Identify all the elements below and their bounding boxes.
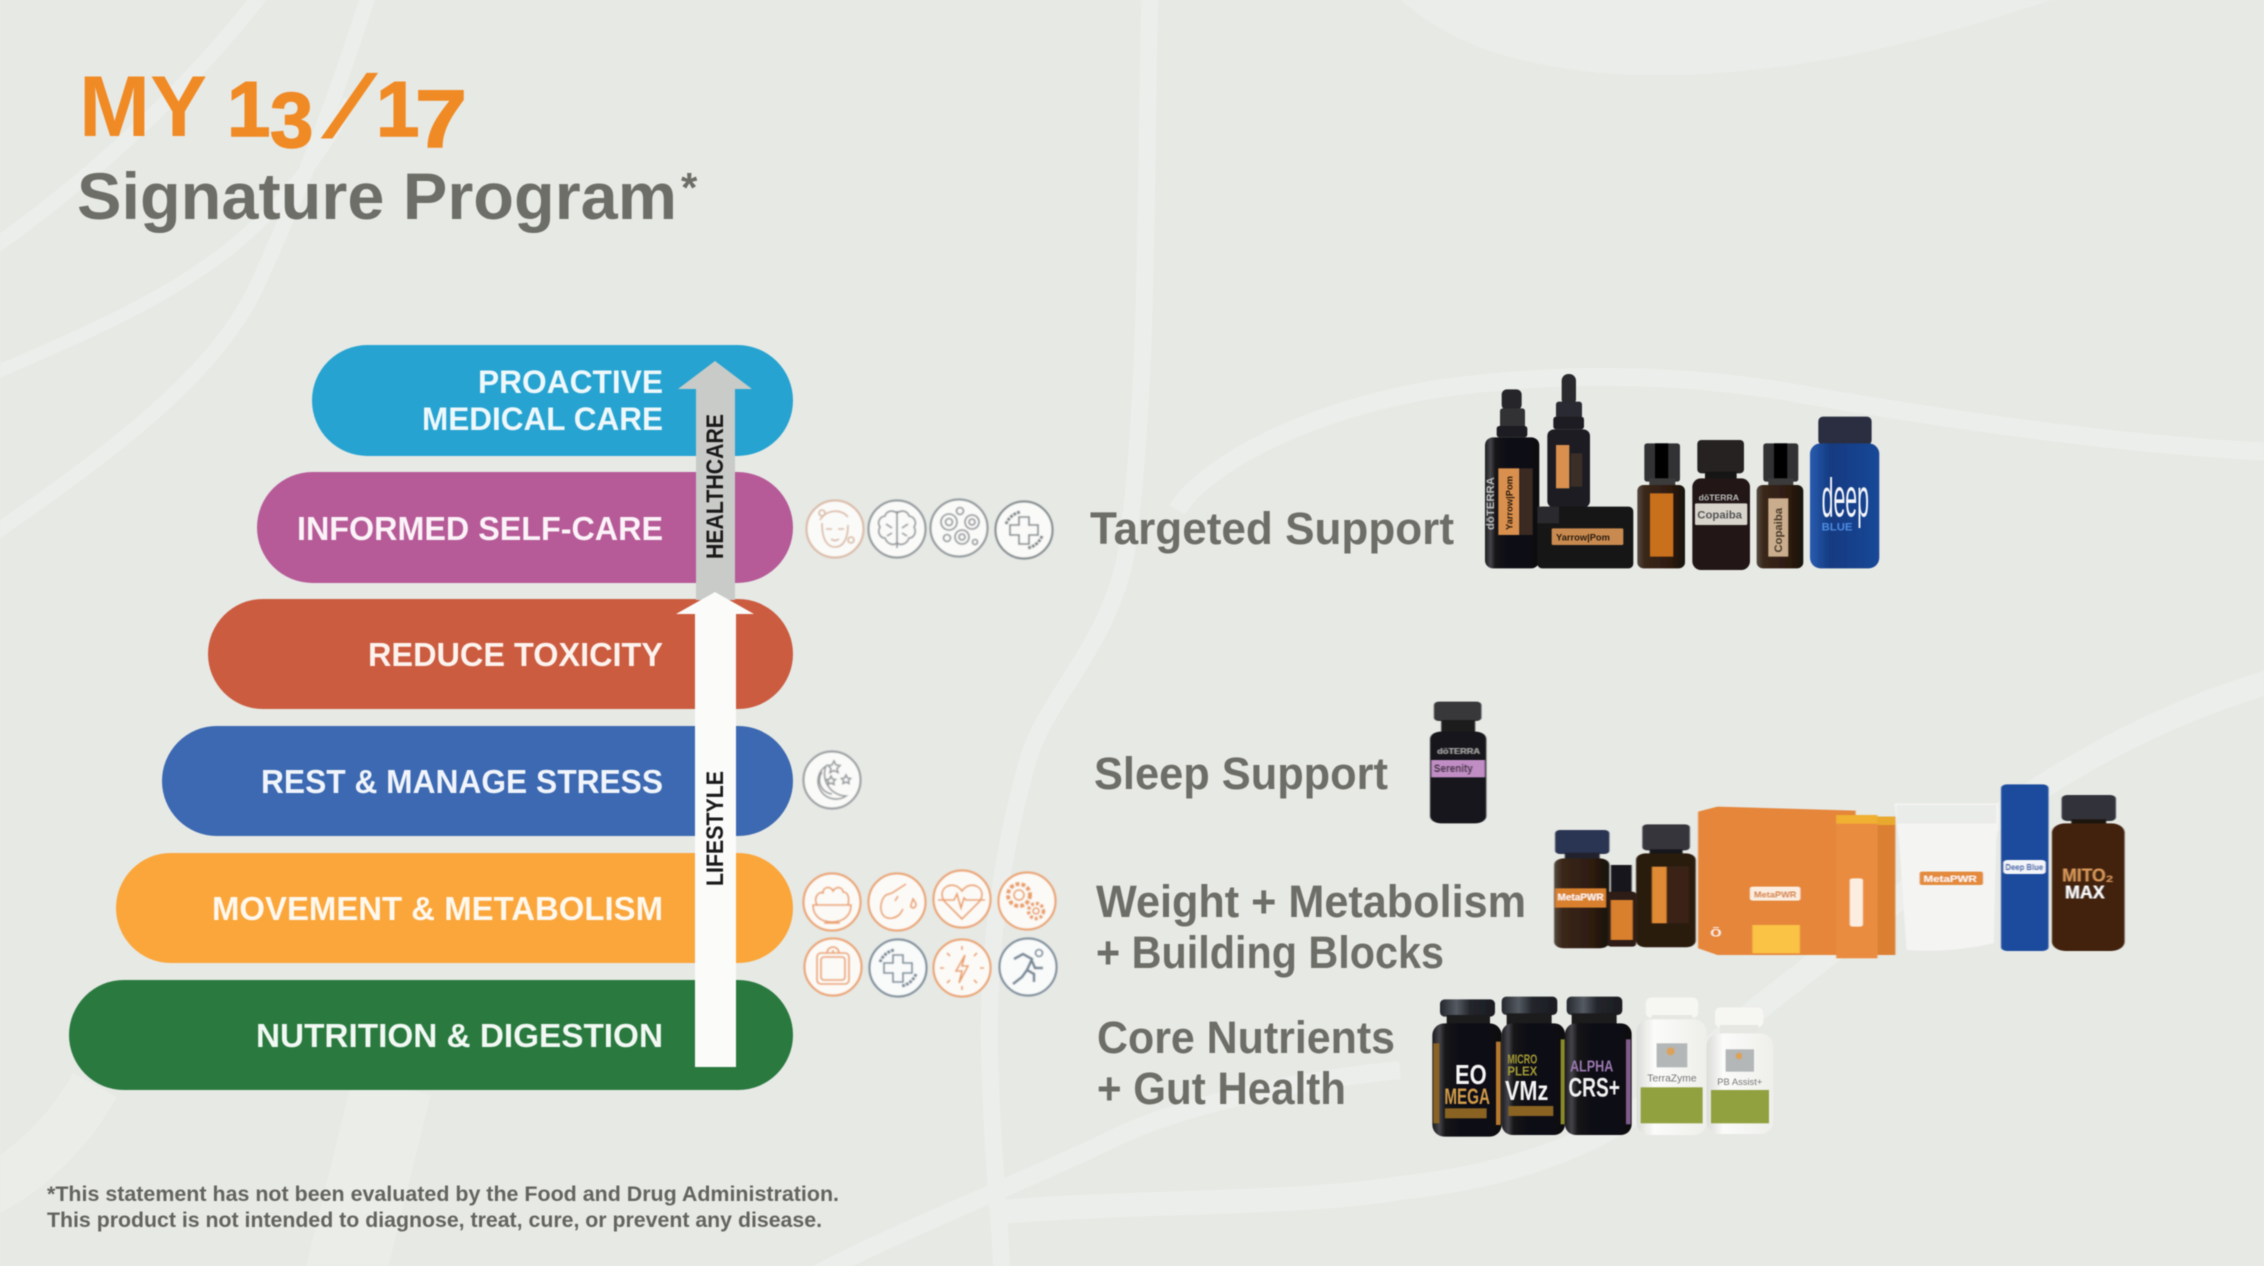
icon: cells <box>930 500 988 556</box>
arrow: lifestyle: LIFESTYLE <box>702 771 729 886</box>
arrow: healthcare: HEALTHCARE <box>702 414 729 559</box>
icon: gears <box>998 872 1056 930</box>
icons grid: weight and metabolism <box>804 870 1056 996</box>
bottle: copaiba softgels <box>1692 440 1750 570</box>
bottle: alpha crs: CRS+ <box>1568 1073 1620 1103</box>
label: core nutrients gut health: Core Nutrients <box>1097 1012 1395 1063</box>
products: core nutrients <box>1432 997 1773 1137</box>
pouch: metapwr <box>1894 803 1999 951</box>
bottle: pb assist <box>1707 1007 1773 1134</box>
label: targeted support: Targeted Support <box>1090 503 1454 554</box>
footnote: *This statement has not been evaluated by the Food and Drug Administration. <box>47 1183 839 1206</box>
box: metapwr sticks: ō <box>1710 924 1722 940</box>
label: weight metabolism building blocks: + Building Blocks <box>1096 927 1444 978</box>
jar: yarrow pom body: Yarrow|Pom <box>1556 532 1610 542</box>
bottle: alpha crs: ALPHA <box>1570 1059 1613 1076</box>
bottle: yarrow pom serum <box>1485 389 1539 568</box>
arrow: healthcare <box>678 361 752 600</box>
pill: movement and metabolism <box>116 853 793 963</box>
bottle: yarrow pom dropper <box>1547 374 1590 508</box>
bottle: metapwr softgels <box>1554 830 1609 948</box>
pill: informed self-care <box>257 472 793 583</box>
bottle: deep blue <box>1810 417 1879 568</box>
title: 7 <box>415 74 467 165</box>
tube: deep blue <box>2001 784 2049 951</box>
bottle: microplex vmz: VMz <box>1505 1075 1548 1106</box>
label: weight metabolism building blocks: Weight + Metabolism <box>1096 876 1526 927</box>
pill: proactive medical care: PROACTIVE <box>478 364 663 400</box>
icon: brain <box>868 500 926 558</box>
icon: scale <box>804 938 862 996</box>
pill: rest and manage stress <box>162 726 793 836</box>
bottle: yarrow pom serum: dōTERRA <box>1485 477 1497 530</box>
pill: nutrition and digestion <box>69 980 793 1090</box>
bottle: copaiba softgels: Copaiba <box>1697 510 1743 522</box>
bottle: mito2max <box>2052 795 2125 951</box>
icon: finger prick <box>868 874 926 930</box>
title <box>79 59 467 165</box>
footnote: This product is not intended to diagnose, treat, cure, or prevent any disease. <box>47 1209 822 1232</box>
products: sleep and metabolism <box>1430 702 2125 958</box>
bottle: essential oil orange <box>1637 443 1685 568</box>
bottle: serenity softgels: Serenity <box>1434 762 1473 774</box>
pill: movement and metabolism: MOVEMENT & METABOLISM <box>212 890 663 927</box>
bottle: deep blue: BLUE <box>1822 522 1853 534</box>
sticks: metapwr <box>1836 815 1895 958</box>
bottle: microplex vmz: MICRO <box>1507 1052 1537 1066</box>
products: targeted support <box>1485 374 1879 570</box>
bottle: microplex vmz <box>1502 997 1565 1135</box>
bottle: copaiba oil <box>1757 443 1803 568</box>
text: deep <box>1822 467 1869 529</box>
icon: heart rate <box>934 870 990 928</box>
pill: reduce toxicity <box>208 599 793 709</box>
title: MY <box>79 59 207 155</box>
arrow: lifestyle <box>676 592 754 1067</box>
bottle: terrazyme: TerraZyme <box>1647 1074 1697 1085</box>
pill: nutrition and digestion: NUTRITION & DIGESTION <box>256 1017 663 1054</box>
bottle: xeo mega: EO <box>1455 1059 1487 1090</box>
icon: energy bolt <box>934 940 990 996</box>
bottle: mito2max: MITO₂ <box>2062 865 2113 886</box>
bottle: copaiba oil: Copaiba <box>1773 507 1785 553</box>
bottle: pb assist: PB Assist+ <box>1717 1077 1762 1087</box>
bottle: terrazyme <box>1637 998 1707 1135</box>
bottle: serenity softgels: dōTERRA <box>1437 747 1480 756</box>
box: metapwr sticks <box>1698 807 1856 955</box>
bottle: mito2max: MAX <box>2065 881 2105 902</box>
label: weight metabolism building blocks <box>1096 876 1526 978</box>
bottle: metapwr assist <box>1636 824 1696 947</box>
icon: immune cross blue <box>870 940 926 996</box>
bottle: alpha crs <box>1565 997 1632 1135</box>
icon: face <box>806 500 864 558</box>
label: sleep support: Sleep Support <box>1094 748 1388 799</box>
icon: runner <box>1000 938 1056 996</box>
label: core nutrients gut health <box>1097 1012 1395 1114</box>
pill: reduce toxicity: REDUCE TOXICITY <box>368 636 663 673</box>
pill: informed self-care: INFORMED SELF-CARE <box>297 510 663 547</box>
label: core nutrients gut health: + Gut Health <box>1097 1063 1346 1114</box>
bottle: metapwr vial <box>1607 865 1636 947</box>
box: metapwr sticks: MetaPWR <box>1754 890 1797 900</box>
pyramid <box>69 345 793 1090</box>
pouch: metapwr: MetaPWR <box>1923 874 1977 884</box>
bottle: microplex vmz: PLEX <box>1507 1065 1538 1079</box>
title: / <box>312 59 385 155</box>
bottle: copaiba softgels: dōTERRA <box>1699 493 1740 503</box>
bottle: xeo mega: MEGA <box>1444 1084 1490 1109</box>
tube: deep blue: Deep Blue <box>2005 863 2043 872</box>
footnote <box>47 1183 839 1232</box>
icon: sleep moon <box>804 752 860 808</box>
icon: immune cross <box>996 502 1052 558</box>
pill: rest and manage stress: REST & MANAGE STRESS <box>261 763 663 800</box>
bottle: metapwr softgels: MetaPWR <box>1558 892 1604 903</box>
title: 1 <box>376 65 419 153</box>
subtitle: * <box>681 164 698 211</box>
icons row: targeted support <box>806 500 1052 558</box>
pill: proactive medical care: MEDICAL CARE <box>422 401 663 437</box>
bottle: serenity softgels <box>1430 702 1486 823</box>
bottle: yarrow pom serum: Yarrow|Pom <box>1505 476 1515 530</box>
icon: salad bowl <box>804 874 860 930</box>
subtitle: Signature Program <box>77 159 677 233</box>
pill: proactive medical care <box>312 345 793 456</box>
bottle: xeo mega <box>1432 999 1502 1137</box>
jar: yarrow pom body <box>1537 507 1633 568</box>
title: 13 <box>227 65 313 164</box>
